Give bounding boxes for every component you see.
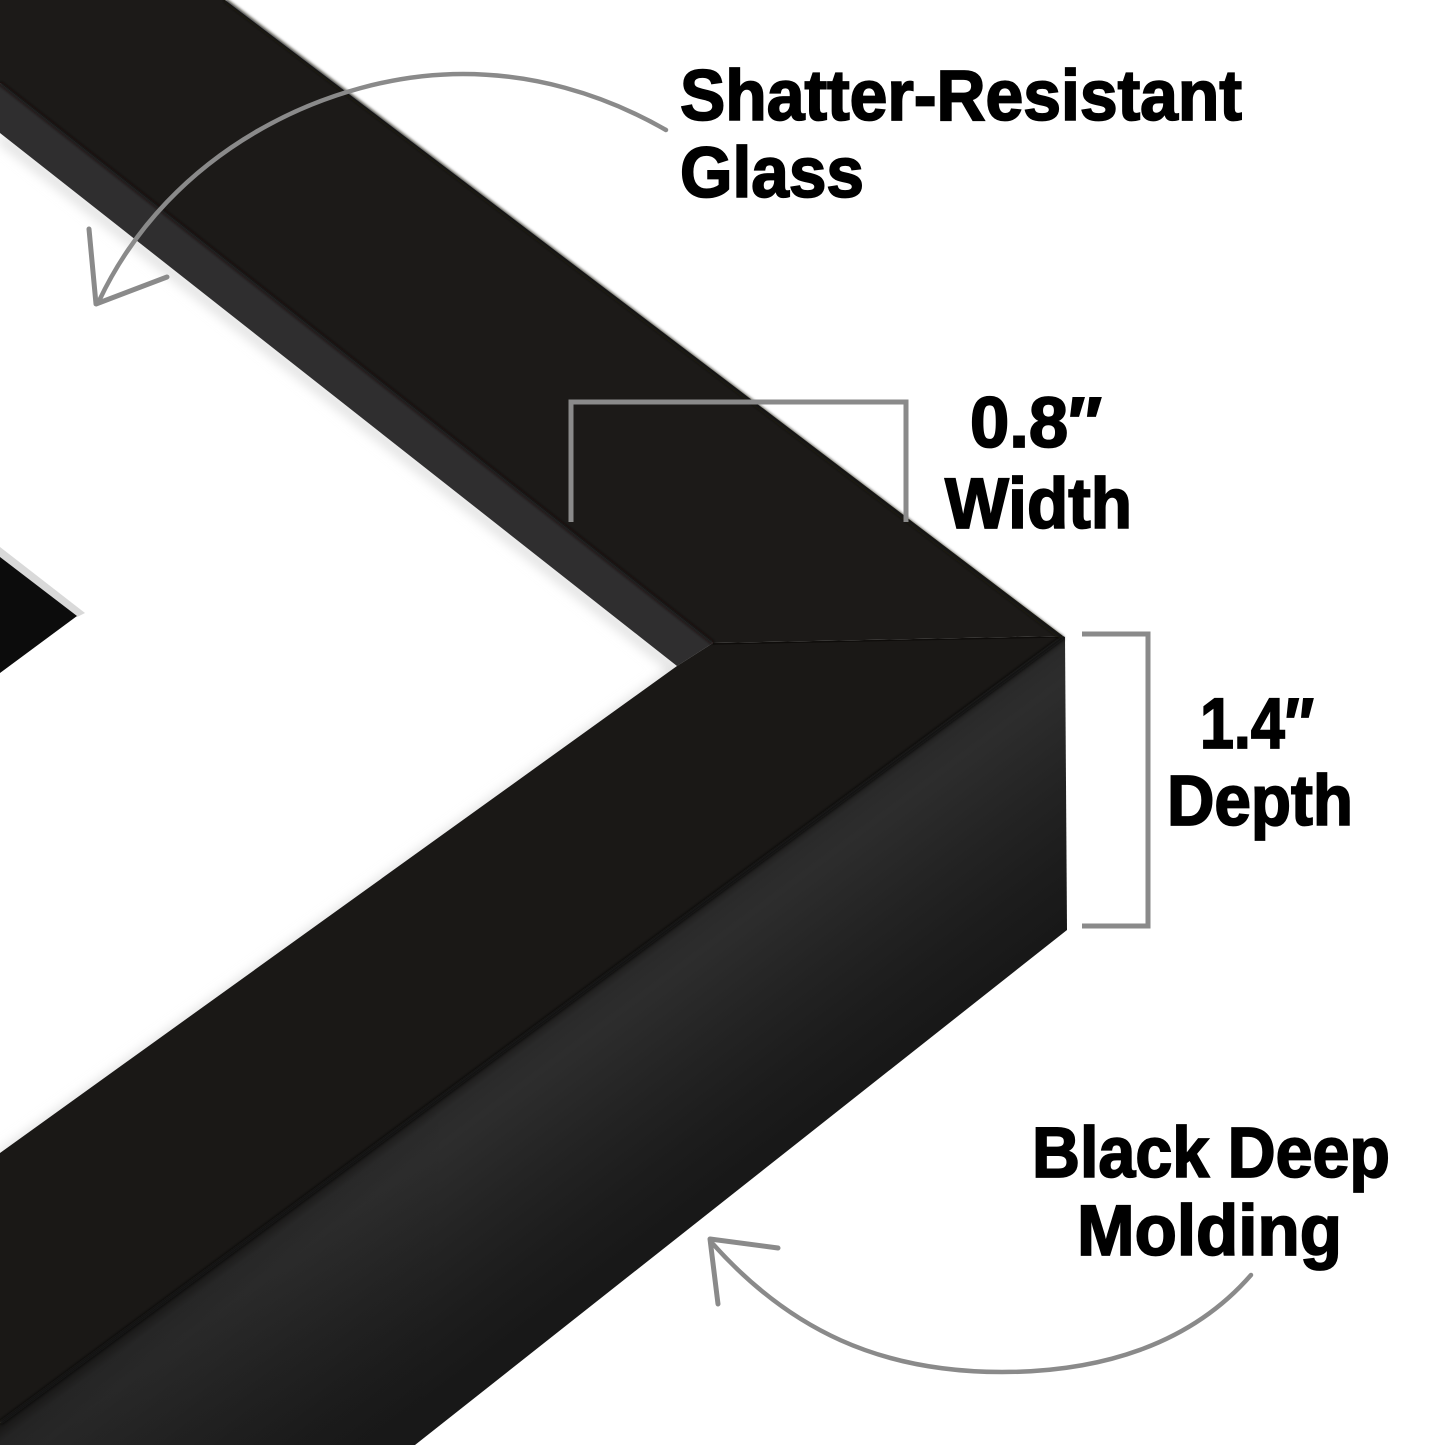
inner shadow on mat: [0, 137, 677, 1157]
frame corner: [0, 0, 1067, 1445]
label: width: [945, 384, 1132, 544]
label: shatter-resistant glass: Shatter-Resistant: [680, 57, 1242, 136]
label: depth: 1.4″: [1200, 685, 1314, 764]
inner picture corner: [0, 547, 85, 673]
label: black deep molding: Black Deep: [1032, 1114, 1390, 1193]
picture black area: [0, 557, 77, 673]
inner rabbet lip: [0, 83, 713, 666]
label: shatter-resistant glass: Glass: [680, 134, 864, 213]
bottom molding face: [0, 636, 1063, 1423]
arrow: black deep molding: [710, 1239, 1251, 1372]
side left shading: [0, 1083, 460, 1445]
miter seam: [713, 637, 1060, 644]
picture mat edge: [0, 547, 85, 617]
bracket: width: [571, 402, 906, 522]
label: width: Width: [945, 465, 1132, 544]
top molding face: [0, 0, 1063, 643]
bracket: depth: [1082, 634, 1148, 926]
molding side: [0, 636, 1067, 1445]
top face outer edge shade: [225, 0, 1061, 637]
face and side edge: [0, 637, 1063, 1423]
label: shatter-resistant glass: [680, 57, 1242, 213]
label: black deep molding: Molding: [1077, 1192, 1342, 1271]
face and lip edge: [0, 83, 713, 643]
label: depth: Depth: [1167, 762, 1353, 841]
arrow: shatter-resistant glass: [89, 74, 666, 304]
label: black deep molding: [1032, 1114, 1390, 1271]
label: width: 0.8″: [970, 384, 1102, 463]
label: depth: [1167, 685, 1353, 841]
